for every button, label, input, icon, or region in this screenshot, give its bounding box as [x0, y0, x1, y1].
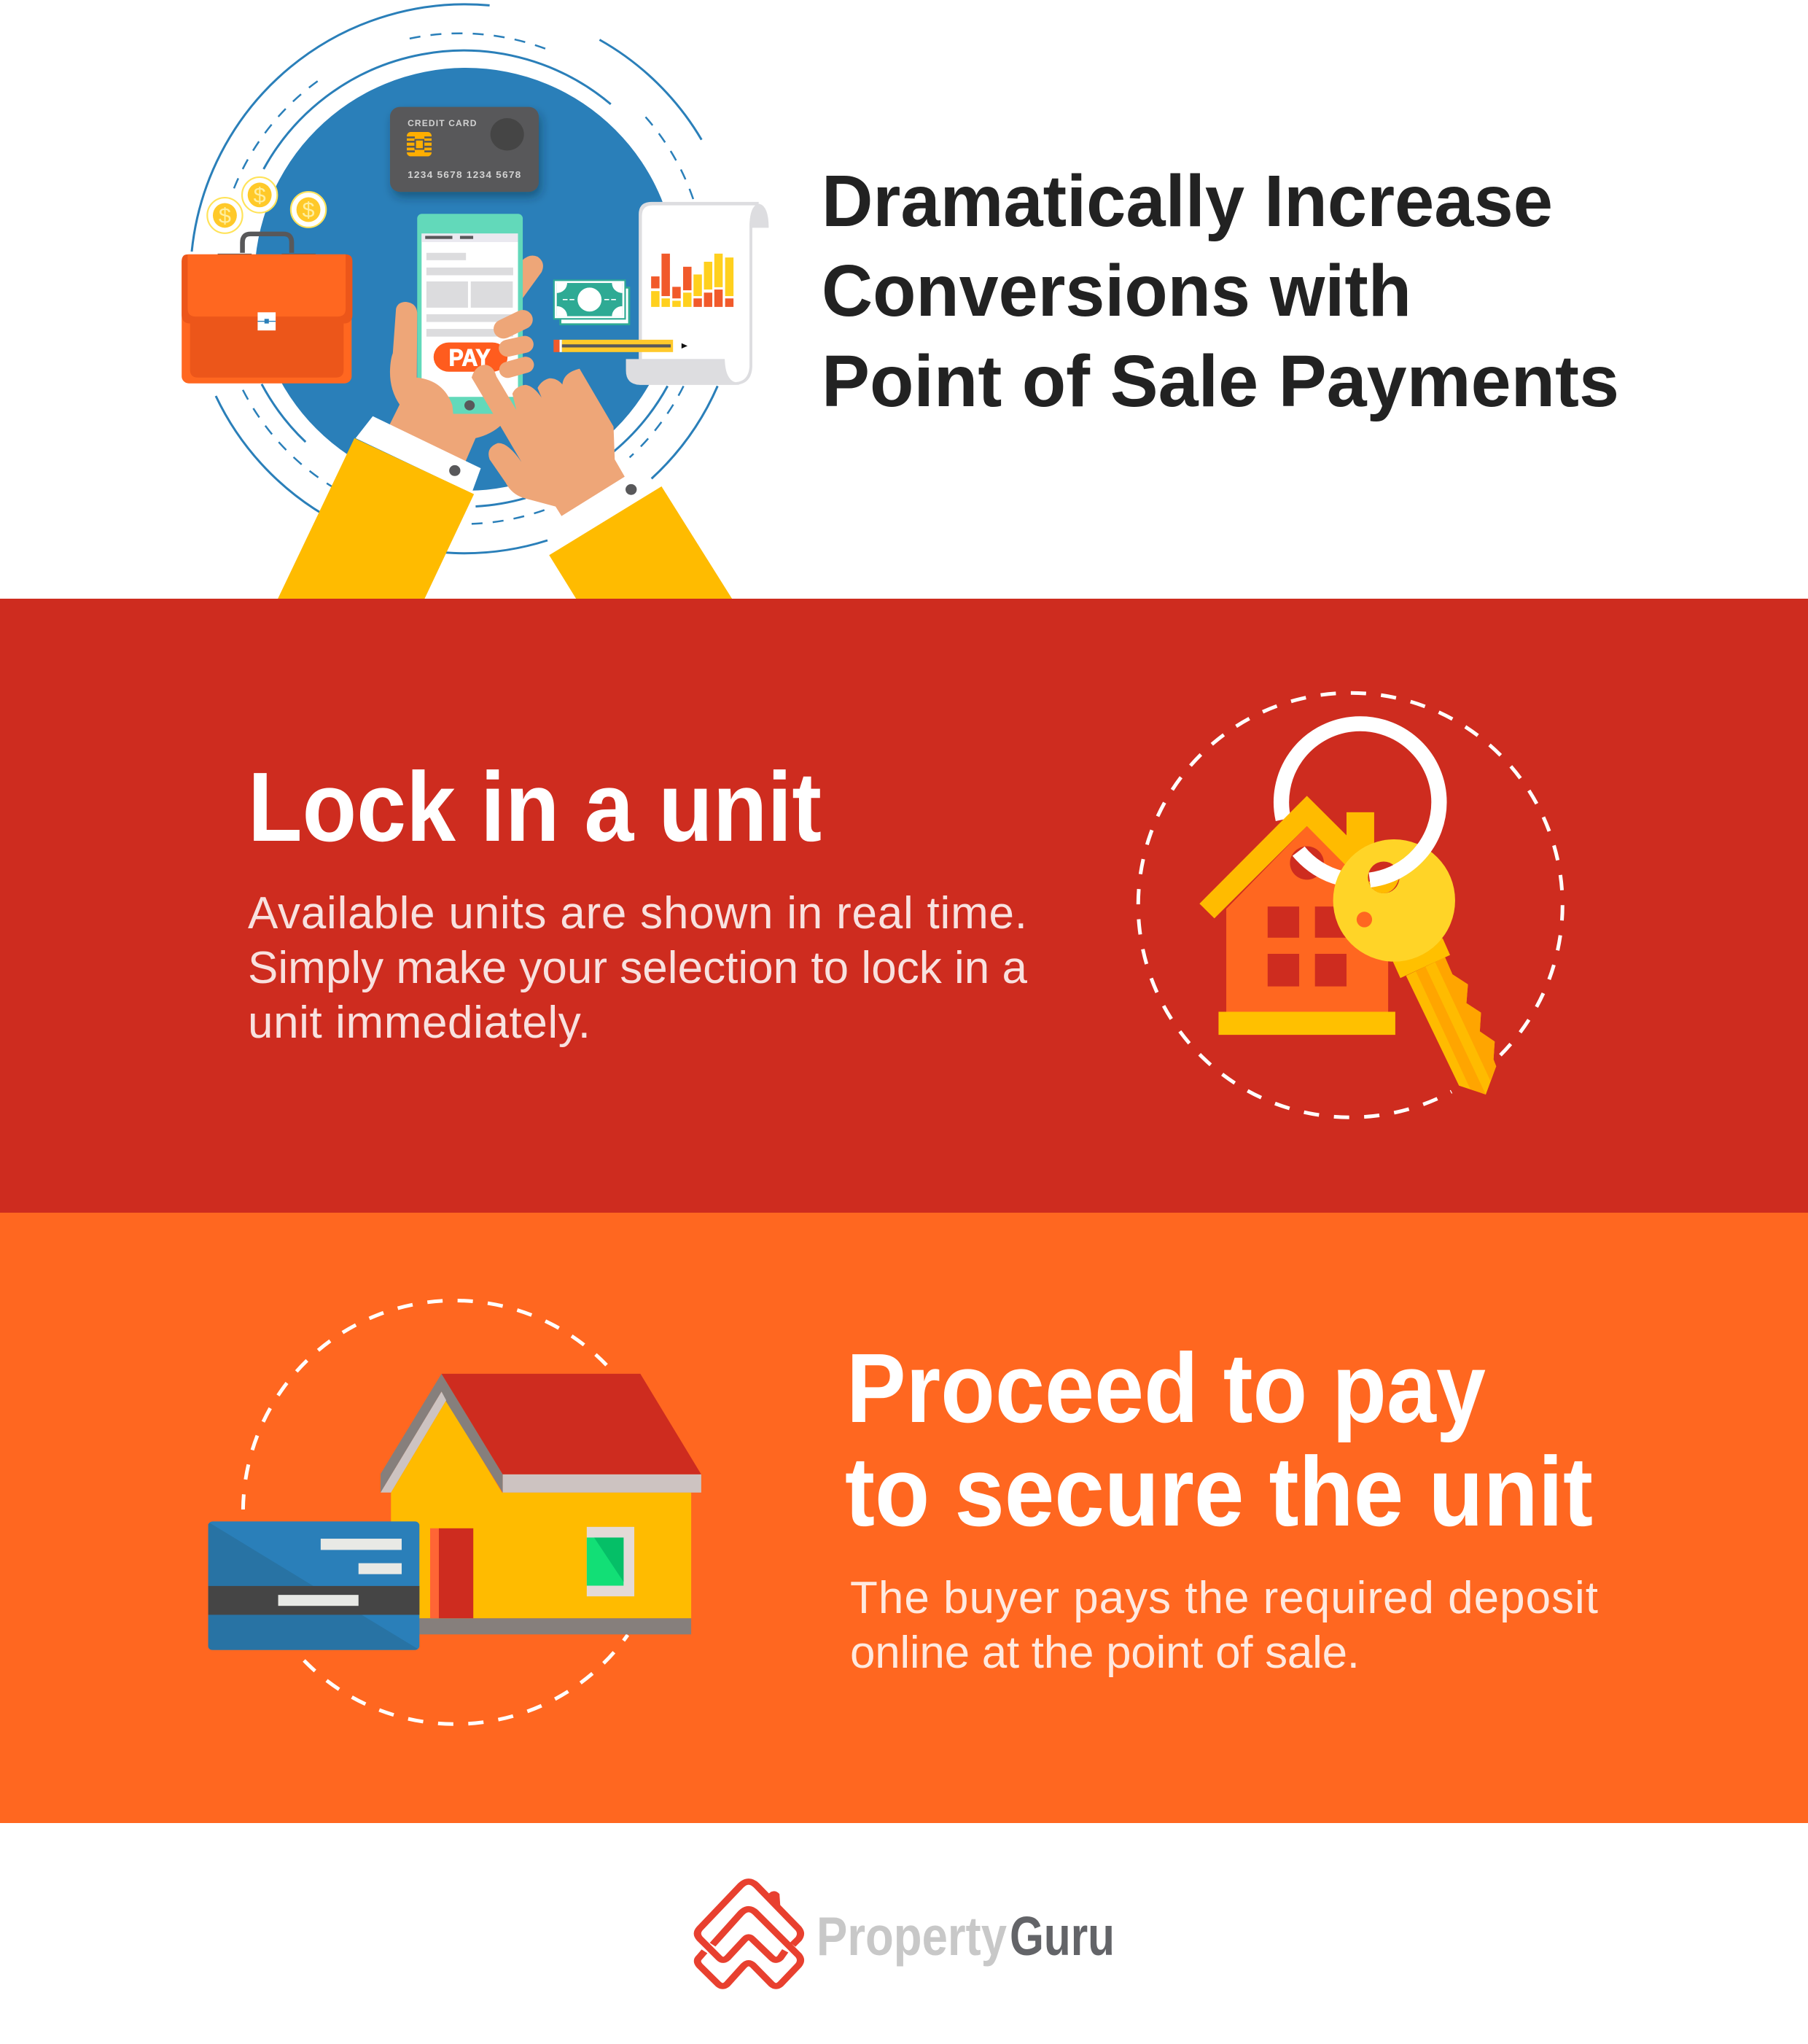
- dashed circle: [243, 1300, 628, 1724]
- panel: proceed to pay: [0, 1213, 1808, 1823]
- dashed orbit ring: [233, 34, 693, 524]
- icon: coins: $: [219, 204, 231, 228]
- text block: lock description: unit immediately.: [248, 998, 591, 1048]
- text block: lock description: [248, 888, 1028, 1048]
- icon: banknotes: [553, 279, 630, 325]
- logo mark: [698, 1881, 800, 1986]
- icon: house keychain and key: [1199, 724, 1496, 1095]
- title: Point of Sale Payments: [822, 341, 1619, 422]
- logo wordmark: Property: [817, 1905, 1007, 1967]
- heading: lock in a unit: Lock in a unit: [248, 752, 822, 862]
- door: [430, 1528, 473, 1618]
- icon: coins: $: [254, 184, 266, 208]
- right sleeve: [549, 486, 732, 599]
- title: [822, 160, 1619, 422]
- heading: proceed to pay: to secure the unit: [845, 1437, 1593, 1547]
- left shirt cuff: [356, 416, 480, 494]
- button: PAY: PAY: [449, 345, 491, 371]
- house: [381, 1374, 701, 1634]
- dashed circle: [1138, 693, 1562, 1117]
- payment card: [209, 1521, 419, 1650]
- logo wordmark: Guru: Guru: [1010, 1905, 1115, 1967]
- icon: credit card: [390, 107, 539, 192]
- illustration: mobile point of sale payment: [182, 4, 768, 599]
- key ring front: [1298, 851, 1341, 878]
- text block: payment description: [850, 1573, 1598, 1678]
- icon: pencil: [553, 340, 687, 352]
- key: [1333, 839, 1496, 1095]
- text block: lock description: Simply make your selection to lock in a: [248, 943, 1028, 993]
- right shirt cuff: [550, 477, 661, 555]
- icon: coins: [207, 177, 326, 233]
- icon: report document: [626, 202, 768, 385]
- icon: credit card: 1234 5678 1234 5678: [408, 169, 521, 180]
- house tag: [1199, 796, 1395, 1035]
- window: [587, 1527, 634, 1596]
- illustration: house and payment card: [209, 1374, 701, 1650]
- heading: proceed to pay: Proceed to pay: [846, 1333, 1486, 1443]
- text block: payment description: online at the point of sale.: [850, 1628, 1360, 1678]
- icon: credit card: CREDIT CARD: [408, 118, 477, 128]
- icon: briefcase: [182, 234, 352, 384]
- solid orbit rings: [192, 4, 717, 553]
- heading: proceed to pay: [845, 1333, 1593, 1547]
- panel: lock in a unit: [0, 599, 1808, 1213]
- left sleeve: [278, 438, 474, 599]
- panel: header: [182, 3, 1616, 599]
- logo: PropertyGuru: [698, 1881, 1115, 1986]
- left hand holding phone: [389, 302, 526, 462]
- text block: lock description: Available units are shown in real time.: [248, 888, 1027, 939]
- text block: payment description: The buyer pays the required deposit: [850, 1573, 1598, 1623]
- artwork group: [182, 107, 768, 599]
- phone: [417, 214, 523, 414]
- blue disk: [254, 68, 677, 491]
- left hand back finger: [522, 256, 543, 299]
- title: Dramatically Increase: [822, 160, 1553, 242]
- icon: coins: $: [303, 199, 315, 222]
- right hand pressing pay: [472, 365, 625, 516]
- title: Conversions with: [822, 250, 1411, 332]
- key ring over key: [1370, 802, 1439, 880]
- key ring back: [1282, 724, 1439, 820]
- button: PAY: [434, 343, 507, 372]
- bar chart: [651, 254, 733, 307]
